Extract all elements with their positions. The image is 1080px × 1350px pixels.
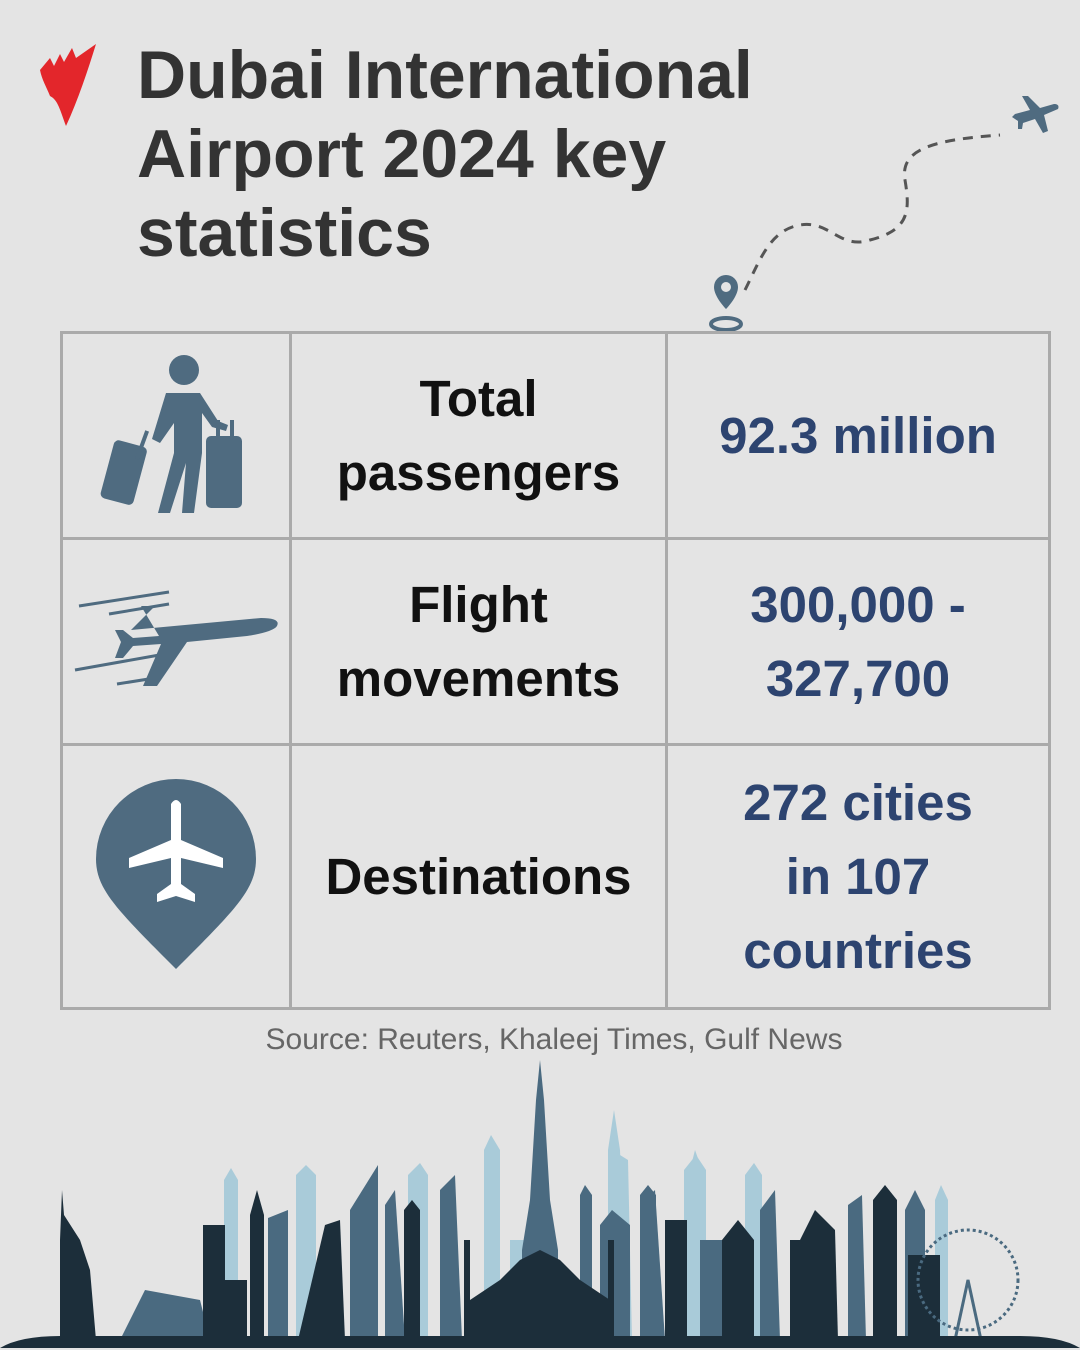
table: countries (743, 922, 973, 978)
logo (40, 44, 96, 126)
table: Destinations (325, 848, 632, 904)
icon: flying plane (74, 590, 278, 686)
table: 300,000 - (750, 576, 966, 632)
title (137, 37, 753, 271)
table (60, 331, 1051, 1010)
table: movements (337, 650, 620, 706)
source: Source: Reuters, Khaleej Times, Gulf News (266, 1023, 842, 1056)
icon: traveler (100, 355, 242, 513)
skyline illustration (0, 1060, 1080, 1348)
table: 92.3 million (719, 406, 997, 464)
table: in 107 (786, 848, 930, 904)
title: statistics (137, 195, 432, 271)
table: 272 cities (743, 774, 973, 830)
table: 327,700 (766, 650, 950, 706)
icon: flight path with plane and pin (709, 96, 1058, 331)
table: Total (419, 370, 538, 426)
title: Dubai International (137, 37, 753, 113)
table: Flight (409, 576, 548, 632)
icon: plane pin (96, 779, 256, 969)
title: Airport 2024 key (137, 116, 666, 192)
table: passengers (337, 444, 620, 500)
